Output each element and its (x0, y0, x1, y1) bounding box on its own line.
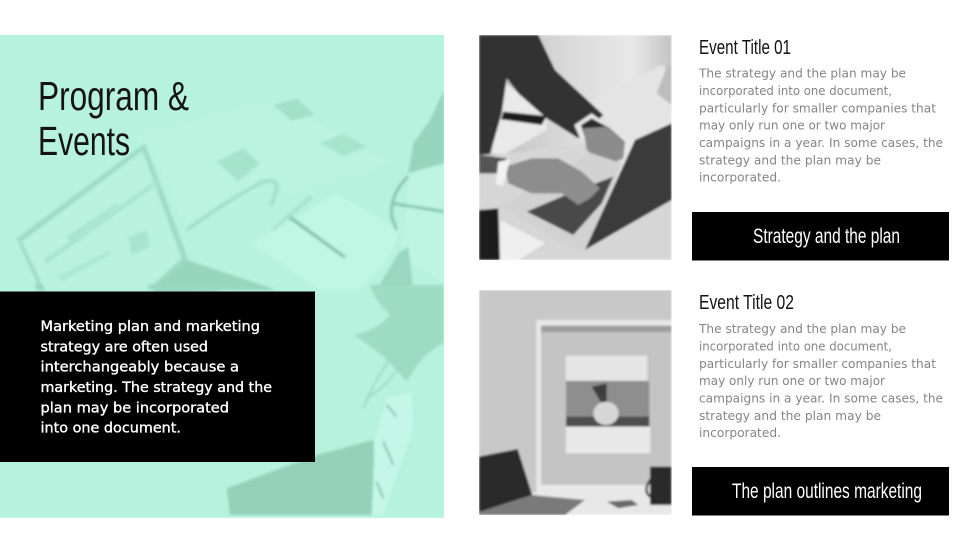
panel: mint photo background (0, 35, 444, 518)
text block: event 01 description: incorporated. (699, 170, 781, 185)
banner: Strategy and the plan: Strategy and the plan (753, 225, 900, 248)
photo: framed vase print on wall (479, 290, 672, 515)
text block: event 02 description: The strategy and the plan may be (698, 321, 906, 336)
text block: event 01 description: campaigns in a year. In some cases, the (699, 135, 943, 150)
banner: Strategy and the plan (692, 212, 949, 260)
event title 01: Event Title 01 (699, 36, 791, 59)
banner: The plan outlines marketing (692, 467, 949, 516)
text block: event 02 description: particularly for smaller companies that (699, 356, 936, 371)
text block: event 02 description (698, 321, 943, 440)
text block: intro paragraph: Marketing plan and marketing (40, 319, 260, 335)
event title 02: Event Title 02 (699, 291, 794, 314)
icon: woman hair and shirt (227, 285, 444, 515)
text block: event 02 description: strategy and the plan may be (699, 408, 881, 423)
text block: event 01 description: The strategy and the plan may be (698, 66, 906, 80)
text block: event 01 description: may only run one or two major (699, 118, 886, 133)
text block: event 01 description: strategy and the plan may be (699, 152, 881, 167)
panel: black intro text box (0, 292, 315, 462)
text block: event 02 description: campaigns in a year. In some cases, the (699, 390, 943, 406)
text block: event 01 description: incorporated into one document, (699, 83, 892, 98)
text block: intro paragraph: strategy are often used (40, 339, 208, 355)
text block: intro paragraph: into one document. (40, 421, 181, 437)
text block: event 01 description: particularly for smaller companies that (699, 100, 936, 115)
text block: intro paragraph: plan may be incorporated (40, 400, 229, 416)
text block: intro paragraph: marketing. The strategy and the (40, 380, 272, 396)
text block: event 02 description: incorporated. (699, 425, 781, 440)
text block: event 02 description: incorporated into one document, (699, 338, 892, 354)
icon: open magazine on desk (186, 98, 364, 231)
heading: Program & Events: Events (38, 118, 130, 164)
text block: intro paragraph (40, 319, 272, 437)
heading: Program & Events (38, 73, 189, 164)
icon: desk edge (34, 284, 217, 292)
text block: intro paragraph: interchangeably because a (40, 360, 239, 376)
photo: hands typing on laptop (479, 35, 672, 260)
icon: notebook and pen (272, 196, 395, 258)
text block: event 01 description (698, 66, 943, 185)
icon: woman with glasses (377, 90, 444, 290)
icon: laptop (17, 143, 277, 290)
text block: event 02 description: may only run one or two major (699, 373, 886, 388)
heading: Program & Events: Program & (38, 73, 189, 119)
